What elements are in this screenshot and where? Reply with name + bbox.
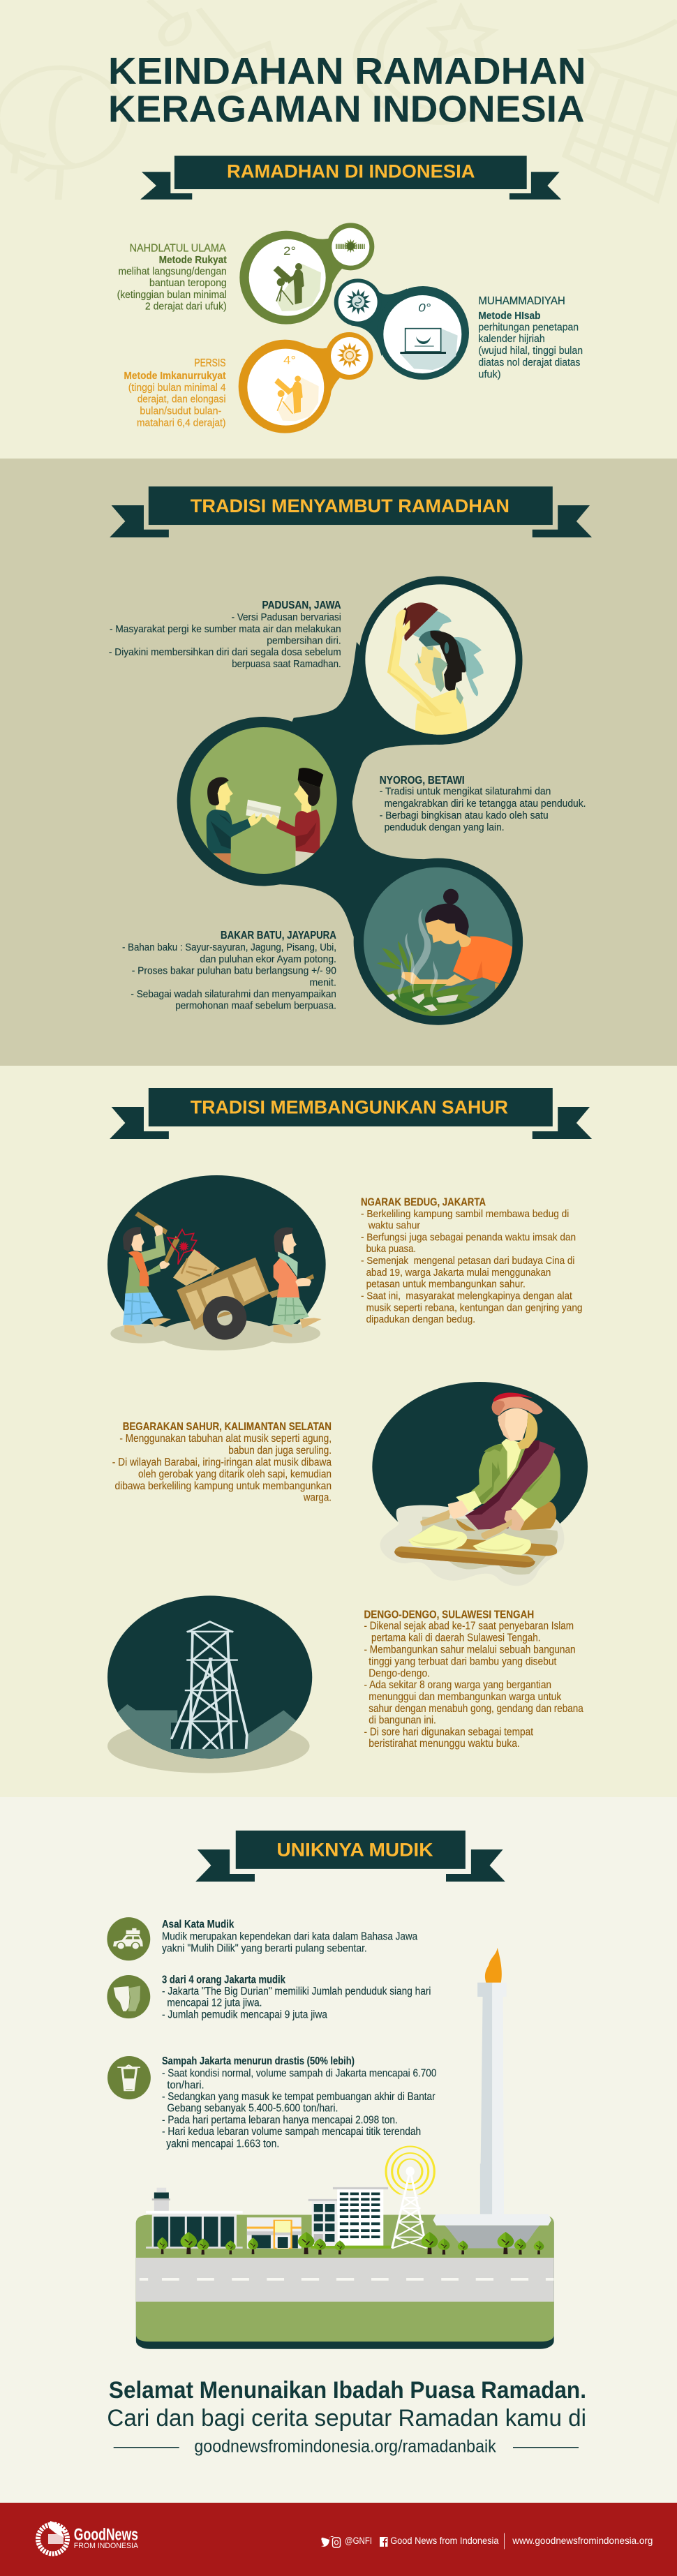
title: KERAGAMAN INDONESIA (108, 89, 585, 131)
ground and road (136, 2214, 554, 2349)
icon: trash bin (107, 2056, 151, 2099)
text: Sampah Jakarta menurun drastis: Gebang sebanyak 5.400-5.600 ton/hari. (167, 2103, 338, 2115)
text: Sampah Jakarta menurun drastis: ton/hari. (167, 2080, 204, 2091)
text: Sampah Jakarta menurun drastis: - Hari kedua lebaran volume sampah mencapai titik terendah (162, 2126, 421, 2138)
logo: Good News from Indonesia emblem: GoodNews (74, 2526, 138, 2545)
text: Dengo-Dengo, Sulawesi Tengah: DENGO-DENGO, SULAWESI TENGAH (364, 1609, 534, 1621)
text: Nahdlatul Ulama: (ketinggian bulan minimal (117, 289, 227, 301)
text: Muhammadiyah: (wujud hilal, tinggi bulan (478, 345, 583, 357)
text: Ngarak Bedug, Jakarta: - Saat ini, masyarakat melengkapinya dengan alat (361, 1290, 572, 1302)
text: Dengo-Dengo, Sulawesi Tengah: - Di sore hari digunakan sebagai tempat (364, 1727, 534, 1738)
text: Bakar Batu, Jayapura: - Proses bakar puluhan batu berlangsung +/- 90 (132, 965, 336, 977)
text: Muhammadiyah: kalender hijriah (478, 333, 545, 345)
icon: Jakarta map (107, 1975, 150, 2018)
text: Padusan, Jawa: - Versi Padusan bervariasi (232, 611, 341, 623)
text: Dengo-Dengo, Sulawesi Tengah: tinggi yang terbuat dari bambu yang disebut (369, 1656, 557, 1668)
text: Bakar Batu, Jayapura: BAKAR BATU, JAYAPURA (221, 930, 336, 941)
text: degree labels: 4° (283, 354, 296, 367)
text: Dengo-Dengo, Sulawesi Tengah: beristirahat menunggu waktu buka. (369, 1738, 520, 1750)
text: Nahdlatul Ulama: Metode Rukyat (159, 254, 227, 266)
text: Muhammadiyah: perhitungan penetapan (478, 321, 579, 334)
text: Nyorog, Betawi: NYOROG, BETAWI (380, 775, 465, 787)
title: KEINDAHAN RAMADHAN (108, 50, 586, 92)
text: 3 dari 4 orang Jakarta mudik: 3 dari 4 orang Jakarta mudik (162, 1974, 285, 1986)
office towers (308, 2187, 391, 2249)
text: degree labels: 2° (283, 244, 296, 258)
text: Sampah Jakarta menurun drastis (162, 2055, 437, 2150)
text: degree labels: 0° (418, 301, 431, 315)
banner: Ramadhan di Indonesia: RAMADHAN DI INDONESIA (227, 161, 475, 182)
social links: @GNFI (345, 2535, 372, 2546)
text: Bakar Batu, Jayapura: menit. (310, 977, 336, 989)
text: Ngarak Bedug, Jakarta (361, 1196, 582, 1325)
text: Dengo-Dengo, Sulawesi Tengah: - Membangunkan sahur melalui sebuah bangunan (364, 1644, 576, 1656)
closing message (107, 2377, 586, 2457)
logo: Good News from Indonesia emblem: FROM INDONESIA (74, 2542, 139, 2550)
connected dark blob behind tradition circles (177, 576, 523, 1025)
social links: Good News from Indonesia (390, 2535, 499, 2546)
text: Dengo-Dengo, Sulawesi Tengah: menunggui dan membangunkan warga untuk (369, 1691, 561, 1703)
text: Persis: derajat, dan elongasi (137, 394, 226, 405)
text: Padusan, Jawa: - Diyakini membersihkan diri dari segala dosa sebelum (109, 646, 341, 658)
text: Ngarak Bedug, Jakarta: buka puasa. (366, 1243, 416, 1255)
illustration: Ngarak Bedug cart (107, 1175, 326, 1353)
icon: car with luggage (107, 1917, 150, 1960)
text: Begarakan Sahur, Kalimantan Selatan: - Di wilayah Barabai, iring-iringan alat musik dibawa (112, 1457, 332, 1468)
illustration: Nyorog two people exchanging gift (191, 727, 337, 874)
text: Begarakan Sahur, Kalimantan Selatan: oleh gerobak yang ditarik oleh sapi, kemudian (138, 1468, 332, 1480)
text: Muhammadiyah: Metode HIsab (478, 310, 540, 322)
text: Nyorog, Betawi: penduduk dengan yang lain. (385, 821, 504, 833)
closing message: Cari dan bagi cerita seputar Ramadan kamu di (107, 2405, 586, 2432)
text: Ngarak Bedug, Jakarta: musik seperti rebana, kentungan dan genjring yang (366, 1302, 582, 1313)
text: Bakar Batu, Jayapura: - Bahan baku : Sayur-sayuran, Jagung, Pisang, Ubi, (122, 941, 336, 953)
shop building (247, 2217, 302, 2249)
text: Begarakan Sahur, Kalimantan Selatan: babun dan juga seruling. (228, 1445, 332, 1457)
banner: Tradisi Membangunkan Sahur (110, 1088, 592, 1139)
text: Persis: bulan/sudut bulan- (140, 405, 221, 417)
illustration: Begarakan Sahur musician (372, 1382, 588, 1586)
icons: mudik topics (107, 1917, 151, 2099)
text: Nahdlatul Ulama (117, 243, 227, 313)
text: Bakar Batu, Jayapura: permohonan maaf sebelum berpuasa. (175, 1000, 336, 1012)
text: Padusan, Jawa: berpuasa saat Ramadhan. (232, 658, 341, 670)
airport-style building (146, 2188, 243, 2249)
text: Muhammadiyah: ufuk) (478, 368, 501, 380)
text: Padusan, Jawa: PADUSAN, JAWA (262, 600, 341, 611)
monument base (433, 2164, 551, 2248)
man striking the drum (123, 1212, 179, 1337)
text: Begarakan Sahur, Kalimantan Selatan: BEGARAKAN SAHUR, KALIMANTAN SELATAN (123, 1421, 332, 1433)
illustration: Jakarta city and road (136, 2147, 554, 2349)
section background: Uniknya Mudik (0, 1797, 677, 2503)
text: Sampah Jakarta menurun drastis: - Sedangkan yang masuk ke tempat pembuangan akhir di Bantar (162, 2091, 436, 2103)
banner: Ramadhan di Indonesia (140, 156, 561, 200)
text: 3 dari 4 orang Jakarta mudik (162, 1974, 431, 2020)
text: Dengo-Dengo, Sulawesi Tengah: pertama kali di daerah Sulawesi Tengah. (371, 1632, 540, 1644)
text: Begarakan Sahur, Kalimantan Selatan: dibawa berkeliling kampung untuk membangunkan (114, 1480, 332, 1492)
text: Persis (124, 357, 226, 429)
text: Dengo-Dengo, Sulawesi Tengah: - Ada sekitar 8 orang warga yang bergantian (364, 1679, 551, 1691)
logo: Good News from Indonesia emblem (38, 2521, 139, 2554)
text: Asal Kata Mudik: Asal Kata Mudik (162, 1919, 234, 1930)
banner: Tradisi Menyambut Ramadhan: TRADISI MENYAMBUT RAMADHAN (191, 496, 509, 516)
text: Persis: matahari 6,4 derajat) (137, 417, 226, 429)
text: Ngarak Bedug, Jakarta: - Berkeliling kampung sambil membawa bedug di (361, 1208, 569, 1220)
trees (157, 2232, 544, 2254)
text: Nyorog, Betawi: - Tradisi untuk mengikat silaturahmi dan (380, 786, 551, 798)
text: Nahdlatul Ulama: 2 derajat dari ufuk) (145, 301, 227, 313)
radio tower with signal rings (386, 2147, 434, 2248)
text: Persis: PERSIS (194, 357, 226, 369)
text: 3 dari 4 orang Jakarta mudik: - Jakarta "The Big Durian" memiliki Jumlah penduduk siang hari (162, 1986, 431, 1997)
closing message: goodnewsfromindonesia.org/ramadanbaik (194, 2437, 496, 2457)
text: Sampah Jakarta menurun drastis: Sampah Jakarta menurun drastis (50% lebih) (162, 2055, 355, 2067)
text: Bakar Batu, Jayapura: dan puluhan ekor Ayam potong. (200, 953, 336, 965)
wooden cart with drum box (173, 1249, 314, 1340)
badge: Persis (239, 332, 373, 433)
text: Asal Kata Mudik: yakni "Mulih Dilik" yang berarti pulang sebentar. (162, 1942, 367, 1954)
text: Nahdlatul Ulama: NAHDLATUL ULAMA (130, 243, 226, 255)
text: Dengo-Dengo, Sulawesi Tengah (364, 1609, 583, 1750)
man pulling the cart (272, 1227, 322, 1337)
badge: Nahdlatul Ulama (239, 223, 374, 325)
banner: Tradisi Membangunkan Sahur: TRADISI MEMBANGUNKAN SAHUR (191, 1097, 508, 1118)
section background: Tradisi Menyambut Ramadhan (0, 459, 677, 1066)
text: Sampah Jakarta menurun drastis: - Saat kondisi normal, volume sampah di Jakarta mencapai 6.700 (162, 2067, 437, 2079)
text: degree labels (283, 244, 431, 367)
banner: Tradisi Menyambut Ramadhan (110, 486, 592, 537)
banner: Uniknya Mudik: UNIKNYA MUDIK (276, 1840, 433, 1861)
text: Dengo-Dengo, Sulawesi Tengah: sahur dengan menabuh gong, gendang dan rebana (369, 1703, 583, 1715)
text: Ngarak Bedug, Jakarta: abad 19, warga Jakarta mulai menggunakan (366, 1267, 551, 1279)
section background: Tradisi Membangunkan Sahur (0, 1066, 677, 1797)
text: Padusan, Jawa (109, 600, 341, 670)
text: Bakar Batu, Jayapura (122, 930, 336, 1012)
badge: Muhammadiyah (334, 278, 469, 380)
text: Muhammadiyah: diatas nol derajat diatas (478, 357, 580, 368)
text: Begarakan Sahur, Kalimantan Selatan: warga. (303, 1491, 332, 1503)
text: Persis: Metode Imkanurrukyat (124, 370, 226, 382)
text: Muhammadiyah (478, 295, 583, 380)
text: Dengo-Dengo, Sulawesi Tengah: - Dikenal sejak abad ke-17 saat penyebaran Islam (364, 1621, 574, 1632)
text: Dengo-Dengo, Sulawesi Tengah: Dengo-dengo. (369, 1668, 430, 1680)
text: 3 dari 4 orang Jakarta mudik: mencapai 12 juta jiwa. (167, 1997, 262, 2009)
text: Dengo-Dengo, Sulawesi Tengah: di bangunan ini. (369, 1714, 436, 1727)
text: Nahdlatul Ulama: melihat langsung/dengan (119, 265, 227, 278)
text: Sampah Jakarta menurun drastis: - Pada hari pertama lebaran hanya mencapai 2.098 ton. (162, 2114, 398, 2126)
social links (321, 2533, 653, 2549)
text: Ngarak Bedug, Jakarta: petasan untuk membangunkan sahur. (366, 1278, 526, 1290)
footer (0, 2503, 677, 2576)
illustration: Padusan woman pouring water (365, 584, 516, 738)
text: Persis: (tinggi bulan minimal 4 (128, 382, 226, 394)
text: Padusan, Jawa: pembersihan diri. (267, 635, 341, 647)
text: Muhammadiyah: MUHAMMADIYAH (478, 295, 565, 307)
banner: Uniknya Mudik (195, 1831, 505, 1882)
title (108, 50, 586, 131)
decorative background line art: drum, crescent, ketupat (0, 0, 677, 200)
text: Ngarak Bedug, Jakarta: waktu sahur (368, 1220, 420, 1232)
illustration: Dengo-Dengo bamboo tower (107, 1595, 312, 1773)
text: Ngarak Bedug, Jakarta: NGARAK BEDUG, JAKARTA (361, 1196, 486, 1208)
text: Padusan, Jawa: - Masyarakat pergi ke sumber mata air dan melakukan (110, 623, 341, 635)
diagram: three moon sighting methods (239, 223, 469, 433)
text: Ngarak Bedug, Jakarta: - Berfungsi juga sebagai penanda waktu imsak dan (361, 1231, 576, 1243)
text: Nahdlatul Ulama: bantuan teropong (149, 277, 227, 289)
closing message: Selamat Menunaikan Ibadah Puasa Ramadan. (109, 2377, 586, 2404)
illustration: Monas monument column (477, 1948, 507, 2210)
social links: www.goodnewsfromindonesia.org (512, 2535, 653, 2546)
text: Nyorog, Betawi (380, 775, 586, 833)
text: Nyorog, Betawi: - Berbagi bingkisan atau kado oleh satu (380, 810, 549, 821)
text: Asal Kata Mudik: Mudik merupakan kependekan dari kata dalam Bahasa Jawa (162, 1930, 418, 1942)
text: Ngarak Bedug, Jakarta: dipadukan dengan bedug. (366, 1313, 475, 1325)
illustration: Bakar Batu woman cooking (364, 868, 512, 1017)
text: Nyorog, Betawi: mengakrabkan diri ke tetangga atau penduduk. (385, 798, 586, 810)
section background: Ramadhan di Indonesia (0, 0, 677, 459)
text: Ngarak Bedug, Jakarta: - Semenjak mengenal petasan dari budaya Cina di (361, 1255, 574, 1267)
text: Begarakan Sahur, Kalimantan Selatan (112, 1421, 332, 1503)
text: Begarakan Sahur, Kalimantan Selatan: - Menggunakan tabuhan alat musik seperti agung, (119, 1433, 332, 1445)
spark burst (168, 1230, 200, 1265)
text: Sampah Jakarta menurun drastis: yakni mencapai 1.663 ton. (166, 2138, 279, 2150)
text: Asal Kata Mudik (162, 1919, 418, 1954)
text: Bakar Batu, Jayapura: - Sebagai wadah silaturahmi dan menyampaikan (131, 988, 336, 1000)
text: 3 dari 4 orang Jakarta mudik: - Jumlah pemudik mencapai 9 juta jiwa (162, 2009, 327, 2020)
